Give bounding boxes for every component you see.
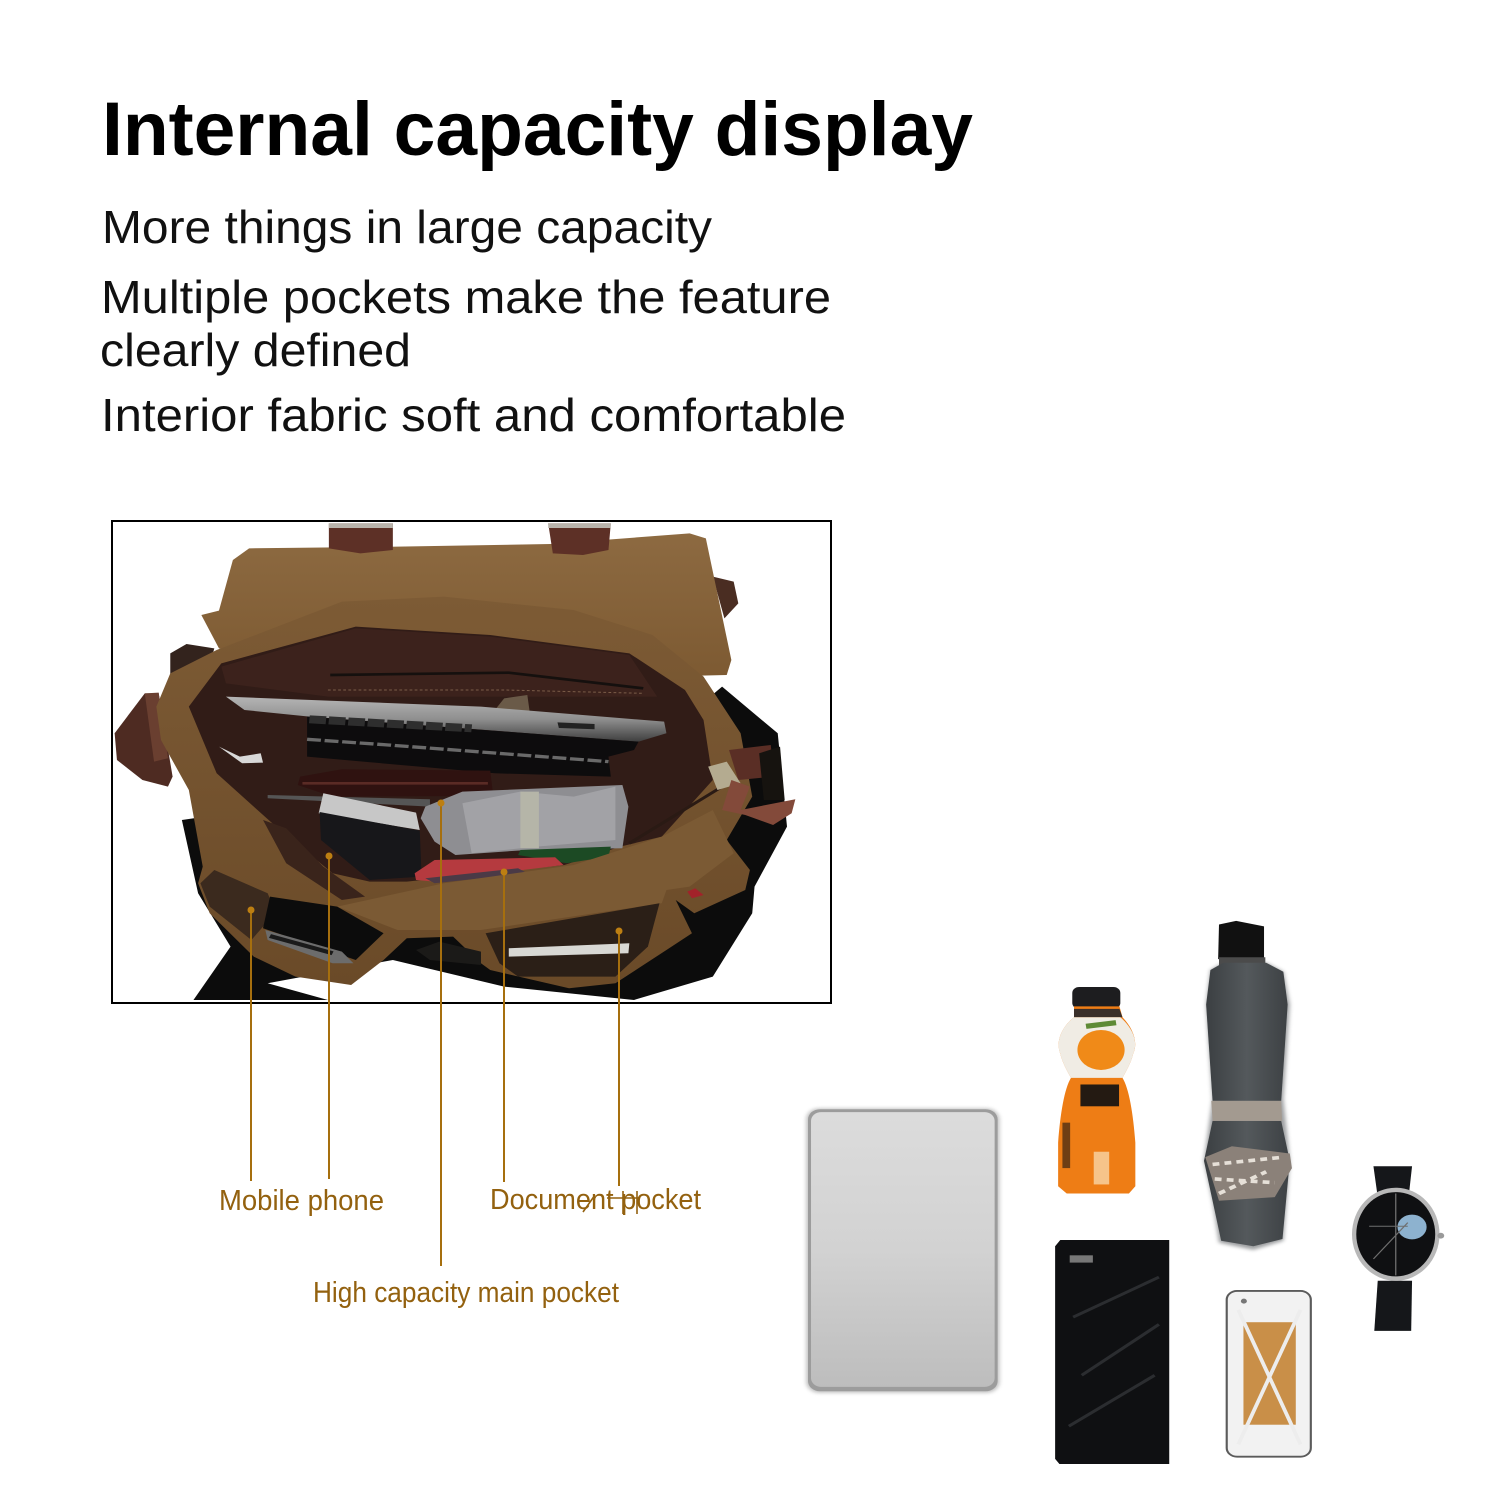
- icon: phone: [1227, 1291, 1311, 1457]
- leader: main pocket: [438, 800, 444, 1266]
- icon: wristwatch: [1352, 1166, 1444, 1331]
- feature line: pockets: Multiple pockets make the feature: [101, 271, 831, 323]
- feature line: pockets: clearly defined: [100, 324, 411, 376]
- icon: tablet: [806, 1108, 999, 1393]
- title: Internal capacity display: [102, 87, 973, 172]
- label: mobile phone: Mobile phone: [219, 1185, 384, 1217]
- leader: outer phone pocket: [248, 906, 254, 1181]
- panel: bag contents: [806, 921, 1444, 1464]
- panel frame: [112, 521, 831, 1003]
- leader: outer document pocket: [616, 928, 622, 1186]
- label: main pocket: High capacity main pocket: [313, 1277, 619, 1309]
- feature line: pockets: [100, 271, 831, 376]
- icon: juice bottle: [1058, 987, 1135, 1194]
- panel: open bag photo: [112, 521, 831, 1003]
- leader: phone pocket: [326, 852, 332, 1179]
- bag illustration: [115, 523, 795, 1000]
- icon: folded umbrella: [1204, 921, 1292, 1250]
- callouts: pocket leader lines: [248, 800, 622, 1266]
- feature text block: [100, 201, 846, 441]
- feature line: fabric: Interior fabric soft and comfortable: [101, 389, 846, 441]
- label: document pocket: Document pocket: [490, 1184, 701, 1216]
- leader: document pocket: [500, 868, 508, 1182]
- feature line: capacity: More things in large capacity: [102, 201, 712, 253]
- icon: black wallet: [1055, 1240, 1169, 1464]
